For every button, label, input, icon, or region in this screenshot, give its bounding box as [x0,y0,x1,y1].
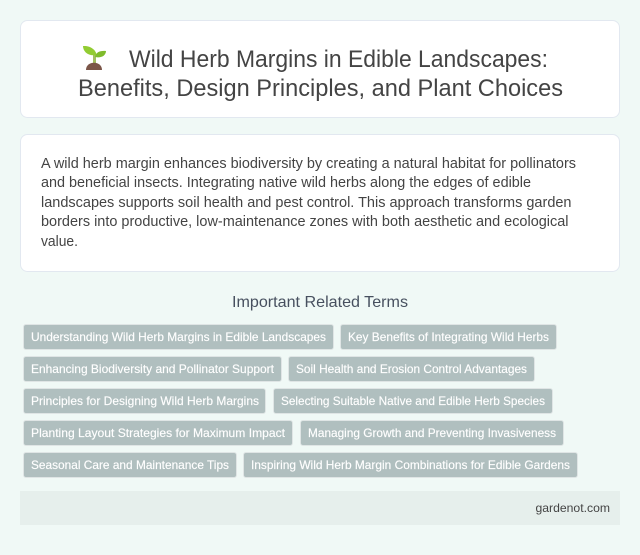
description text: borders into productive, low-maintenance zones with both aesthetic and ecological [41,214,568,230]
panel: header [20,20,620,118]
description text: landscapes supports soil health and pest control. This approach transforms garden [41,195,572,211]
footer [20,491,620,525]
title: Benefits, Design Principles, and Plant Choices [78,75,563,102]
related terms tags: Planting Layout Strategies for Maximum Impact [31,426,286,440]
related terms tags [24,324,578,478]
title: Wild Herb Margins in Edible Landscapes: [129,46,548,73]
related terms tags: Inspiring Wild Herb Margin Combinations for Edible Gardens [251,458,570,472]
related terms tags: Soil Health and Erosion Control Advantages [296,362,527,376]
description text: and beneficial insects. Integrating native wild herbs along the edges of edible [41,175,531,191]
title [78,46,563,102]
icon: seedling [83,46,106,70]
footer credit: gardenot.com [536,501,610,515]
related terms tags: Principles for Designing Wild Herb Margins [31,394,259,408]
related terms tags: Enhancing Biodiversity and Pollinator Support [31,362,275,376]
heading: related terms: Important Related Terms [232,294,408,311]
related terms tags: Understanding Wild Herb Margins in Edible Landscapes [31,330,326,344]
panel: description [20,134,620,272]
description text [41,156,576,250]
description text: A wild herb margin enhances biodiversity by creating a natural habitat for pollinators [41,156,576,172]
related terms tags: Key Benefits of Integrating Wild Herbs [348,330,549,344]
related terms tags: Seasonal Care and Maintenance Tips [31,458,229,472]
description text: value. [41,234,78,250]
related terms tags: Selecting Suitable Native and Edible Herb Species [281,394,545,408]
related terms tags: Managing Growth and Preventing Invasiveness [308,426,556,440]
